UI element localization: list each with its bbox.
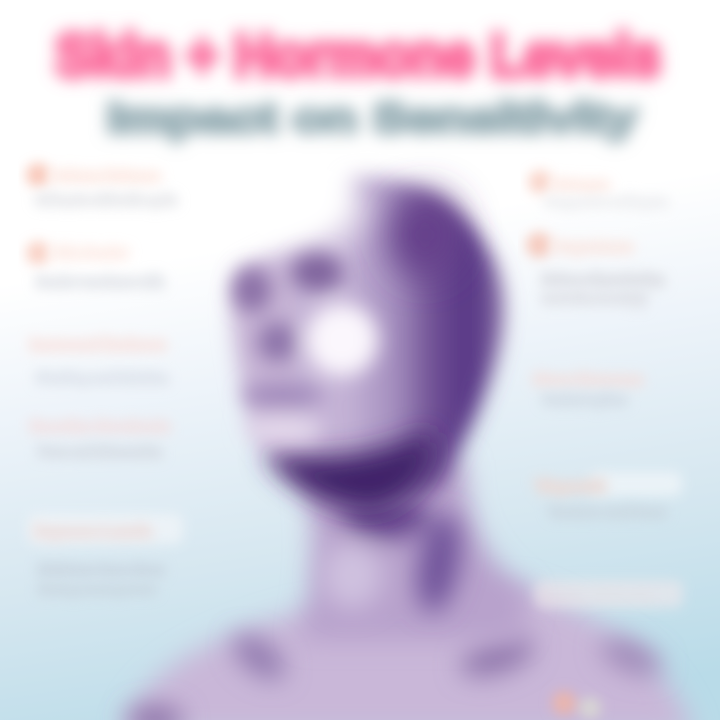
item 2: Skin Barrier xyxy=(52,245,128,262)
item 4: Pores and inflammation xyxy=(38,444,162,461)
face features xyxy=(233,253,378,443)
title line 1: Skin + Hormone Levels xyxy=(55,22,661,89)
shoulders xyxy=(122,585,695,720)
item 1: Oil levels shift with cycle xyxy=(35,192,177,209)
item 5: Moisture loss rises xyxy=(38,562,164,579)
title line 2: Impact on Sensitivity xyxy=(107,94,638,141)
jaw shadow xyxy=(262,430,434,512)
icon xyxy=(26,163,50,187)
item 5 xyxy=(28,514,183,598)
icon xyxy=(528,170,552,194)
item 2: Barrier weakens with xyxy=(36,274,164,291)
item 5 xyxy=(535,580,683,608)
item 3: Cortisol spikes xyxy=(542,392,627,409)
item 2 xyxy=(26,241,164,291)
item 5: Gentle Skincare xyxy=(540,587,655,604)
item 3 xyxy=(533,370,643,409)
item 3: Flushing and irritation xyxy=(36,370,168,387)
item 1: Sebum Balance xyxy=(52,168,160,185)
item 2: and skin reactivity xyxy=(542,290,647,307)
icon: corner logo xyxy=(552,691,601,719)
item 2 xyxy=(526,232,664,307)
item 4: Reactive Breakouts xyxy=(30,417,170,436)
item 2: Progesterone xyxy=(553,239,633,256)
item 2: Raises oil production xyxy=(542,272,664,289)
neck shadow xyxy=(322,491,467,616)
illustration: face and shoulders xyxy=(122,163,695,720)
item 5: during menopause xyxy=(38,581,156,598)
forehead highlight xyxy=(238,163,362,247)
item 1 xyxy=(26,163,177,209)
shoulder shadows xyxy=(127,627,666,720)
right column text xyxy=(526,170,683,608)
item 1: Supports collagen xyxy=(545,194,667,209)
icon xyxy=(26,241,50,265)
item 4 xyxy=(30,417,170,461)
item 3: Stress Hormones xyxy=(533,370,643,389)
item 4 xyxy=(535,472,682,521)
left column text xyxy=(26,163,183,598)
item 4: Texture and tone xyxy=(548,504,666,521)
item 4: Thyroid xyxy=(535,477,605,496)
item 1: Estrogen xyxy=(553,177,609,194)
item 1 xyxy=(528,170,667,209)
item 3: Increased Redness xyxy=(30,335,166,354)
icon xyxy=(526,232,552,258)
neck xyxy=(300,460,530,640)
head silhouette xyxy=(232,177,504,505)
crown shading xyxy=(389,193,461,277)
item 3 xyxy=(30,335,168,387)
item 5: Dryness Levels xyxy=(34,522,152,541)
